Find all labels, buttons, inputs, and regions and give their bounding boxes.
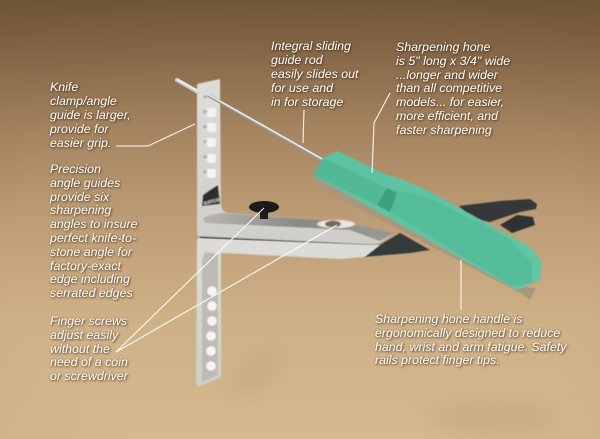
- angle numbers: [203, 95, 207, 174]
- icon: lower angle holes: [206, 286, 217, 371]
- text: sharpening hone: than all competitive: [396, 81, 502, 95]
- icon: sharpening hone: [313, 151, 542, 300]
- text: precision angle guides: serrated edges: [50, 286, 133, 300]
- text: guide rod: easily slides out: [271, 67, 358, 81]
- icon: brand logo: [202, 185, 220, 206]
- text: sharpening hone: ...longer and wider: [396, 68, 498, 82]
- text: hone handle: hand, wrist and arm fatigue. Safety: [375, 340, 566, 354]
- text: precision angle guides: stone angle for: [50, 245, 132, 259]
- icon: upper angle guide slots: [207, 108, 216, 178]
- cast shadows: [222, 352, 555, 434]
- text: hone handle: [374, 312, 569, 369]
- icon: knife blade: [363, 233, 430, 257]
- text: guide rod: for use and: [271, 81, 333, 95]
- text: finger screws: without the: [50, 342, 110, 356]
- angle numbers: 11: [203, 170, 207, 174]
- text: precision angle guides: provide six: [50, 190, 109, 204]
- text: guide rod: [270, 39, 360, 110]
- icon: finger screw: [249, 201, 279, 219]
- text: finger screws: need of a coin: [50, 355, 128, 369]
- angle numbers: 20: [203, 125, 207, 129]
- text: guide rod: Integral sliding: [271, 39, 351, 53]
- text: guide rod: guide rod: [271, 53, 323, 67]
- text: knife clamp: [49, 80, 131, 152]
- icon: brand logo: GATCO: [203, 197, 220, 206]
- text: finger screws: or screwdriver: [50, 369, 128, 383]
- text: precision angle guides: perfect knife-to-: [50, 231, 136, 245]
- text: guide rod: in for storage: [271, 95, 343, 109]
- text: precision angle guides: Precision: [50, 162, 101, 176]
- icon: rod stub behind plate: [177, 79, 200, 93]
- slit: [200, 236, 375, 246]
- text: sharpening hone: faster sharpening: [396, 123, 492, 137]
- text: sharpening hone: models... for easier,: [396, 95, 504, 109]
- angle numbers: 30: [203, 95, 207, 99]
- text: knife clamp: guide is larger,: [50, 108, 131, 122]
- icon: black clamp jaws: [459, 199, 537, 233]
- text: finger screws: [49, 314, 130, 383]
- text: knife clamp: provide for: [50, 122, 109, 136]
- text: sharpening hone: [396, 40, 512, 138]
- leader lines: [116, 93, 461, 352]
- angle numbers: 25: [203, 110, 207, 114]
- text: precision angle guides: angles to insure: [50, 217, 137, 231]
- text: hone handle: Sharpening hone handle is: [375, 312, 522, 326]
- text: precision angle guides: sharpening: [50, 203, 111, 217]
- text: finger screws: Finger screws: [50, 314, 127, 328]
- text: knife clamp: Knife: [50, 80, 78, 94]
- text: precision angle guides: [49, 162, 140, 302]
- text: sharpening hone: is 5" long x 3/4" wide: [396, 54, 510, 68]
- text: precision angle guides: edge including: [50, 272, 130, 286]
- icon: guide rod: [208, 94, 323, 160]
- angle numbers: 15: [203, 155, 207, 159]
- text: knife clamp: clamp/angle: [50, 94, 117, 108]
- angle numbers: 17: [203, 140, 207, 144]
- text: hone handle: rails protect finger tips.: [375, 353, 500, 367]
- icon: lower clamp plate: [196, 238, 380, 387]
- text: precision angle guides: factory-exact: [50, 259, 121, 273]
- text: knife clamp: easier grip.: [50, 136, 111, 150]
- text: precision angle guides: angle guides: [50, 176, 120, 190]
- icon: upper clamp plate: [197, 79, 395, 246]
- text: hone handle: ergonomically designed to reduce: [375, 326, 560, 340]
- text: sharpening hone: Sharpening hone: [396, 40, 490, 54]
- text: sharpening hone: more efficient, and: [396, 109, 498, 123]
- text: finger screws: adjust easily: [50, 328, 118, 342]
- icon: screw hole: [317, 220, 355, 228]
